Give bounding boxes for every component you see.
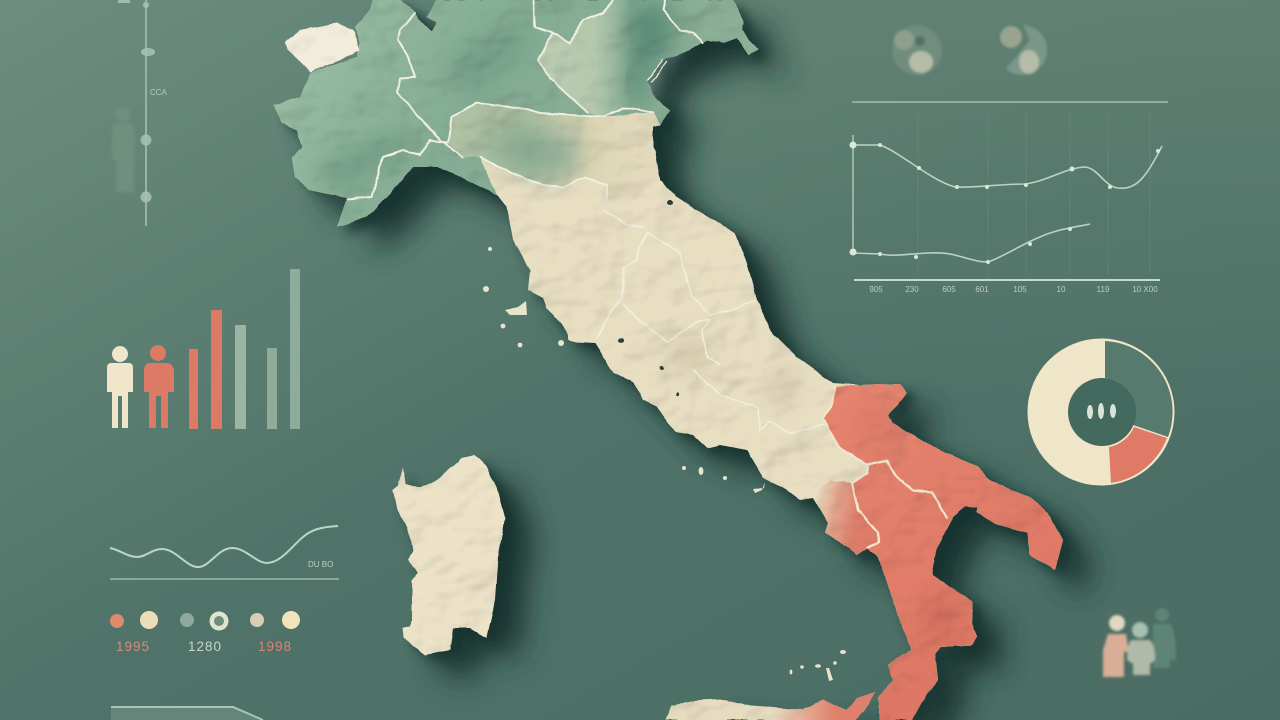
region: Veneto light area bbox=[538, 0, 640, 117]
timeline markers bbox=[118, 0, 155, 202]
x axis labels: 10 X00 bbox=[1132, 285, 1158, 294]
top rule bbox=[852, 101, 1168, 103]
region: northern Italy bbox=[273, 0, 758, 227]
year labels: 1998 bbox=[258, 639, 292, 654]
relief shading: centre and south bbox=[490, 130, 955, 640]
donut centre bbox=[1068, 378, 1136, 446]
donut outline bbox=[1028, 338, 1174, 486]
icon: family group bbox=[1103, 608, 1176, 677]
data markers bbox=[850, 142, 1160, 264]
x axis bbox=[854, 279, 1160, 281]
chart label: DU BO bbox=[308, 560, 333, 569]
timeline axis bbox=[145, 0, 147, 226]
legend dots bbox=[110, 611, 300, 630]
x axis labels: 105 bbox=[1013, 285, 1027, 294]
donut teal segment bbox=[1105, 341, 1173, 437]
x axis labels bbox=[869, 285, 1158, 294]
year labels bbox=[116, 639, 292, 654]
donut red segment bbox=[1109, 427, 1167, 483]
island: Sicily bbox=[665, 692, 875, 720]
x axis labels: 905 bbox=[869, 285, 883, 294]
timeline label: CCA bbox=[150, 88, 168, 97]
small islands bbox=[483, 247, 846, 681]
bar chart bbox=[189, 269, 300, 429]
panel: donut chart bbox=[1028, 338, 1174, 486]
icon: red person bbox=[144, 345, 174, 428]
year labels: 1995 bbox=[116, 639, 150, 654]
icon: two pie globes bbox=[892, 25, 1047, 75]
icon: centre dots bbox=[1087, 403, 1116, 419]
mainland base bbox=[273, 0, 1063, 720]
region: southern Italy bbox=[822, 384, 1063, 720]
map of Italy bbox=[273, 0, 1063, 720]
y axis bbox=[852, 135, 854, 252]
x axis labels: 601 bbox=[975, 285, 989, 294]
grey person bbox=[1127, 622, 1155, 675]
region: Aosta patch bbox=[285, 23, 360, 72]
line chart: wave bbox=[110, 526, 338, 567]
panel: line chart top right bbox=[850, 102, 1168, 294]
small lakes bbox=[618, 200, 680, 396]
region borders bbox=[347, 0, 947, 547]
x axis labels: 10 bbox=[1057, 285, 1066, 294]
island: Sardinia bbox=[393, 455, 505, 655]
x axis labels: 605 bbox=[942, 285, 956, 294]
chart baseline bbox=[110, 578, 339, 580]
donut cream segment bbox=[1034, 340, 1109, 484]
lower line series bbox=[853, 224, 1090, 262]
x axis labels: 230 bbox=[905, 285, 919, 294]
icon: faded person bbox=[112, 106, 135, 192]
panel: people and bars chart bbox=[107, 269, 300, 429]
pink person bbox=[1103, 615, 1129, 677]
upper line series bbox=[853, 145, 1162, 188]
faded person bbox=[1153, 608, 1176, 668]
panel: wave chart and year legend bbox=[110, 526, 339, 654]
bottom left tab bbox=[111, 707, 263, 720]
grid lines bbox=[918, 112, 1150, 275]
region: Campania bbox=[813, 480, 878, 555]
icon: cream person bbox=[107, 346, 133, 428]
relief shading: north bbox=[310, 0, 675, 190]
panel: left timeline bbox=[112, 0, 168, 226]
x axis labels: 119 bbox=[1097, 285, 1110, 294]
map shadows bbox=[282, 7, 1093, 720]
year labels: 1280 bbox=[188, 639, 222, 654]
region: Emilia bbox=[448, 103, 660, 200]
